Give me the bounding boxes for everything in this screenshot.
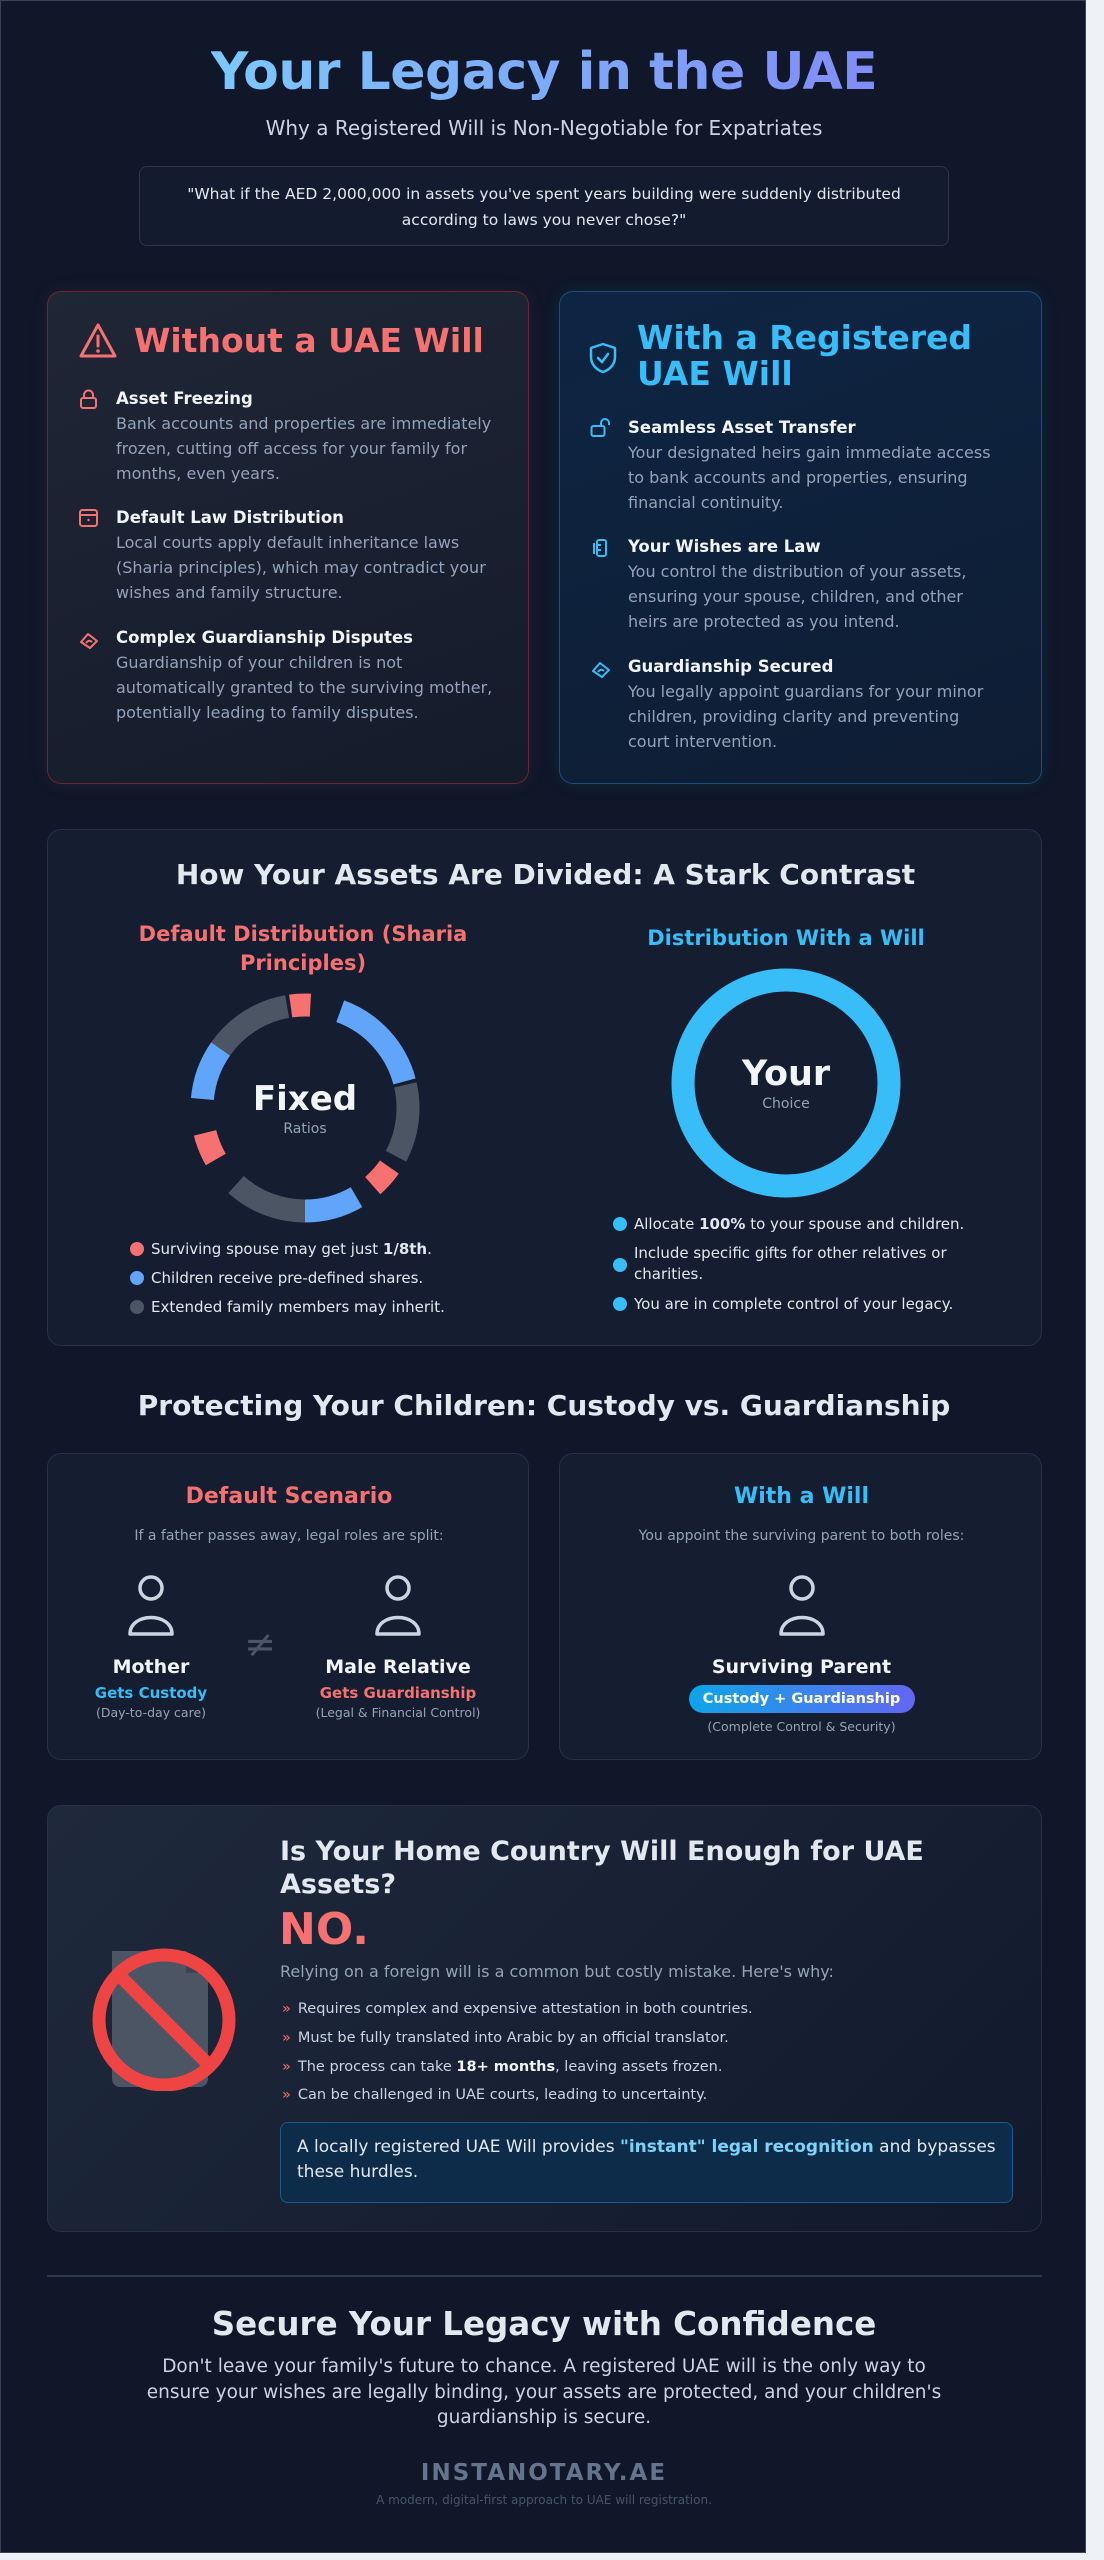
- legend: default: [130, 1240, 445, 1316]
- text: If a father passes away, legal roles are split:: [134, 1528, 444, 1544]
- panel: with a registered will: [559, 291, 1042, 784]
- text: Relying on a foreign will is a common but costly mistake. Here's why:: [280, 1962, 834, 1981]
- subheading: default: Principles): [240, 951, 366, 975]
- quote box: "What if the AED 2,000,000 in assets you've spent years building were suddenly distributed: [187, 185, 901, 203]
- person: male relative: Male Relative: [325, 1656, 471, 1678]
- legend: with a will: You are in complete control of your legacy.: [634, 1295, 953, 1313]
- legend: with a will: Include specific gifts for other relatives or: [634, 1244, 947, 1262]
- subheading: with a will: Distribution With a Will: [647, 926, 925, 950]
- person: male relative: Gets Guardianship: [320, 1684, 476, 1702]
- panel: home country will: [47, 1805, 1042, 2232]
- closing paragraph: guardianship is secure.: [437, 2407, 651, 2428]
- icon: calendar: [79, 509, 98, 527]
- icon: lock: [80, 390, 97, 409]
- heading: UAE Will: [637, 354, 793, 393]
- icon: hand: [80, 633, 98, 649]
- tagline: A modern, digital-first approach to UAE will registration.: [376, 2493, 712, 2507]
- panel: with a registered will: Seamless Asset Transfer: [628, 418, 856, 437]
- item: guardianship disputes: [80, 628, 492, 722]
- heading: Without a UAE Will: [134, 321, 484, 360]
- item: guardianship secured: [592, 657, 984, 751]
- heading: [637, 318, 972, 393]
- bullet list: » The process can take 18+ months, leaving assets frozen.: [282, 2059, 722, 2075]
- legend: with a will: [613, 1215, 964, 1313]
- subheading: default: [139, 922, 467, 975]
- person: surviving parent: Surviving Parent: [712, 1656, 891, 1678]
- heading: How Your Assets Are Divided: A Stark Contrast: [176, 858, 915, 891]
- big answer NO: NO.: [279, 1904, 369, 1955]
- panel: without a UAE will: Default Law Distribution: [116, 508, 344, 527]
- item: wishes are law: [593, 537, 966, 631]
- panel: without a UAE will: Guardianship of your children is not automatically granted to the surviving mother, potentially leading to family disputes.: [116, 653, 492, 722]
- quote box: according to laws you never chose?": [402, 211, 686, 229]
- closing heading: Secure Your Legacy with Confidence: [212, 2305, 876, 2343]
- item: asset freezing: [80, 389, 491, 483]
- chart: your choice donut: Choice: [762, 1096, 810, 1112]
- panel: with a registered will: You legally appoint guardians for your minor children, providing clarity and preventing court intervention.: [628, 682, 983, 751]
- bullet list: [282, 2001, 753, 2103]
- chart: your choice donut: [672, 968, 900, 1198]
- panel: without a UAE will: Local courts apply default inheritance laws (Sharia principles), which may contradict your wishes and family structure.: [116, 533, 486, 602]
- callout: A locally registered UAE Will provides "instant" legal recognition and bypasses these hurdles.: [297, 2137, 996, 2182]
- legend: default: Children receive pre-defined shares.: [151, 1269, 423, 1287]
- item: seamless transfer: [590, 418, 991, 512]
- heading: Default Scenario: [186, 1484, 392, 1509]
- person: mother: (Day-to-day care): [96, 1705, 206, 1720]
- title: Your Legacy in the UAE: [211, 42, 877, 102]
- icon: unlock: [590, 418, 610, 437]
- chart: fixed ratios donut: Fixed: [253, 1079, 357, 1119]
- person: male relative: (Legal & Financial Control): [316, 1705, 480, 1720]
- item: default law distribution: [79, 508, 486, 602]
- legend: with a will: charities.: [634, 1265, 703, 1283]
- panel: with a registered will: Your Wishes are Law: [628, 537, 821, 556]
- legend: with a will: Allocate 100% to your spouse and children.: [634, 1215, 964, 1233]
- person: surviving parent: [689, 1575, 915, 1734]
- chart: fixed ratios donut: Ratios: [283, 1121, 327, 1137]
- bullet list: » Requires complex and expensive attestation in both countries.: [282, 2001, 753, 2017]
- icon: scroll: [593, 539, 607, 557]
- person: male relative: [316, 1575, 480, 1720]
- icon: not equal: ≠: [244, 1622, 276, 1666]
- legend: default: Extended family members may inherit.: [151, 1298, 445, 1316]
- panel: with a registered will: You control the distribution of your assets, ensuring your spouse, children, and other heirs are protected as you intend.: [628, 562, 966, 631]
- closing paragraph: [147, 2356, 941, 2428]
- legend: default: Surviving spouse may get just 1/8th.: [151, 1240, 432, 1258]
- subheading: default: Default Distribution (Sharia: [139, 922, 467, 946]
- heading: With a Registered: [637, 318, 972, 357]
- text: You appoint the surviving parent to both roles:: [639, 1528, 964, 1544]
- icon: hand: [592, 662, 610, 678]
- bullet list: » Must be fully translated into Arabic by an official translator.: [282, 2030, 729, 2046]
- panel: without a UAE will: Bank accounts and properties are immediately frozen, cutting off access for your family for months, even years.: [116, 414, 491, 483]
- panel: with a registered will: Guardianship Secured: [628, 657, 833, 676]
- icon: warning: [80, 323, 117, 358]
- subtitle: Why a Registered Will is Non-Negotiable for Expatriates: [266, 116, 822, 140]
- chart: your choice donut: Your: [741, 1054, 831, 1094]
- badge: [688, 1685, 914, 1713]
- panel: default scenario: [47, 1453, 529, 1760]
- person: mother: Mother: [113, 1656, 189, 1678]
- panel: without a UAE will: Complex Guardianship Disputes: [116, 628, 413, 647]
- heading: Is Your Home Country Will Enough for UAE Assets?: [280, 1836, 924, 1900]
- person: surviving parent: (Complete Control & Security): [707, 1719, 896, 1734]
- icon: no document: [92, 1948, 236, 2091]
- icon: shield: [590, 342, 616, 374]
- closing paragraph: Don't leave your family's future to chance. A registered UAE will is the only way to: [162, 2356, 926, 2377]
- panel: without a UAE will: [47, 291, 529, 784]
- quote box: [139, 166, 949, 246]
- closing paragraph: ensure your wishes are legally binding, your assets are protected, and your children's: [147, 2382, 941, 2402]
- badge: Custody + Guardianship: [703, 1691, 900, 1707]
- brand: INSTANOTARY.AE: [421, 2460, 667, 2486]
- chart: fixed ratios donut: [190, 994, 420, 1222]
- person: mother: Gets Custody: [95, 1684, 207, 1702]
- person: mother: [95, 1575, 207, 1720]
- heading: With a Will: [734, 1484, 869, 1509]
- heading: protecting children: Protecting Your Children: Custody vs. Guardianship: [138, 1389, 950, 1422]
- callout: [280, 2122, 1013, 2203]
- bullet list: » Can be challenged in UAE courts, leading to uncertainty.: [282, 2087, 707, 2103]
- panel: with a will custody: [559, 1453, 1042, 1760]
- panel: with a registered will: Your designated heirs gain immediate access to bank accounts and properties, ensuring financial continuity.: [628, 443, 991, 512]
- panel: without a UAE will: Asset Freezing: [116, 389, 253, 408]
- panel: asset distribution: [47, 829, 1042, 1346]
